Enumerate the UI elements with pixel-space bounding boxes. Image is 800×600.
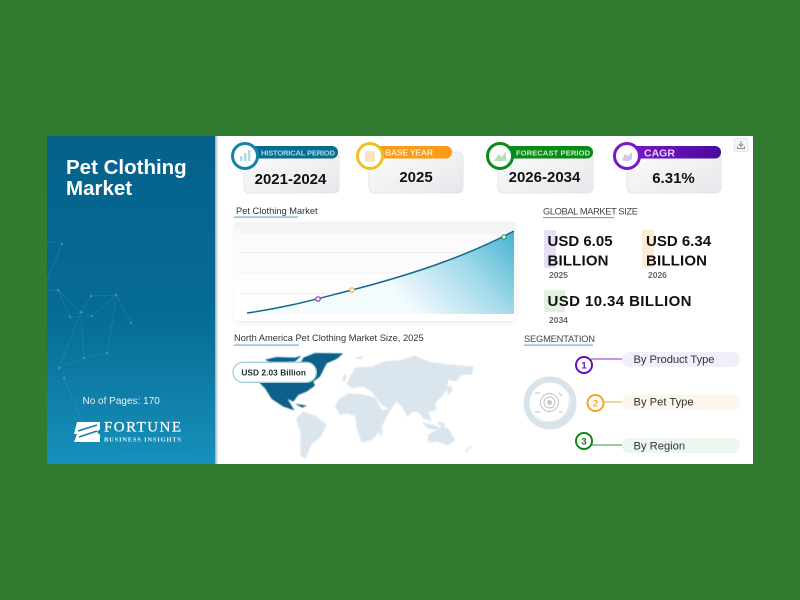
Japan [447,385,452,396]
heading: segmentation: SEGMENTATION [524,334,595,344]
stat: 2034 [544,290,692,325]
data points [316,297,320,301]
panel: sidebar [47,136,220,464]
icon: download button [734,138,748,152]
kpi: cagr [614,144,721,193]
stat: 2026: BILLION [646,252,707,270]
stat: 2025: BILLION [548,252,608,270]
icon: calendar [365,151,375,162]
callout: USD 2.03 Billion [233,362,316,382]
Madagascar [379,428,383,436]
segmentation hub icon [526,380,574,426]
kpi: historical period: 2021-2024 [255,171,327,188]
logo: Fortune Business Insights [74,420,181,444]
kpi: forecast period: FORECAST PERIOD [516,148,591,157]
stat: 2026: USD 6.34 [646,233,712,250]
Africa [335,393,391,442]
Australia [428,427,455,446]
stat: 2026 [642,230,712,280]
segment 3: by region: By Region [634,440,685,452]
kpi: base year: BASE YEAR [385,148,433,158]
segment 1: by product type [576,352,740,373]
segment 2: by pet type: 2 [593,398,598,410]
heading: chart: Pet Clothing Market [236,206,318,216]
pages note: No of Pages: 170 [82,396,160,407]
callout: USD 2.03 Billion: USD 2.03 Billion [241,367,306,377]
icon: chart hand [622,152,632,161]
segment 3: by region: 3 [581,436,587,448]
stat: 2034: 2034 [549,315,568,325]
segment 3: by region [576,433,740,453]
kpi: historical period: HISTORICAL PERIOD [261,148,336,157]
main white card [47,136,753,464]
area under curve [247,231,514,314]
stat: 2025: 2025 [549,270,568,280]
icon: growth [494,151,506,161]
title: Pet Clothing [66,156,187,179]
kpi: base year: 2025 [399,169,433,186]
Eurasia [347,356,473,422]
world map [233,353,473,458]
map: rest of world [296,356,473,458]
stat: 2034: USD 10.34 BILLION [548,293,692,310]
kpi: base year [358,144,463,193]
Arctic islands [355,356,364,359]
curve [247,231,514,313]
line chart panel [234,222,516,322]
stat: 2025 [544,230,613,280]
kpi: historical period [232,144,339,193]
kpi: forecast period: 2026-2034 [509,169,581,186]
icon: bars [240,150,250,161]
segment 2: by pet type: By Pet Type [634,396,694,408]
logo: Fortune Business Insights: FORTUNE [104,420,181,436]
New Zealand [465,445,472,452]
segment 1: by product type: 1 [581,360,587,372]
kpi: cagr: 6.31% [652,170,695,187]
kpi: forecast period [488,144,593,193]
South America [296,412,327,458]
title: Market [66,177,132,200]
segment 1: by product type: By Product Type [634,354,714,366]
kpi: cagr: CAGR [644,148,675,160]
Indonesia [422,422,442,430]
heading: north america: North America Pet Clothing Market Size, 2025 [234,333,424,343]
Britain [342,374,347,381]
heading: global market size: GLOBAL MARKET SIZE [543,206,638,216]
logo: Fortune Business Insights: BUSINESS INSIGHTS [104,436,181,444]
map: north america highlighted [258,353,343,410]
stat: 2026: 2026 [648,270,667,280]
stat: 2025: USD 6.05 [548,233,613,250]
segment 2: by pet type [588,395,740,411]
